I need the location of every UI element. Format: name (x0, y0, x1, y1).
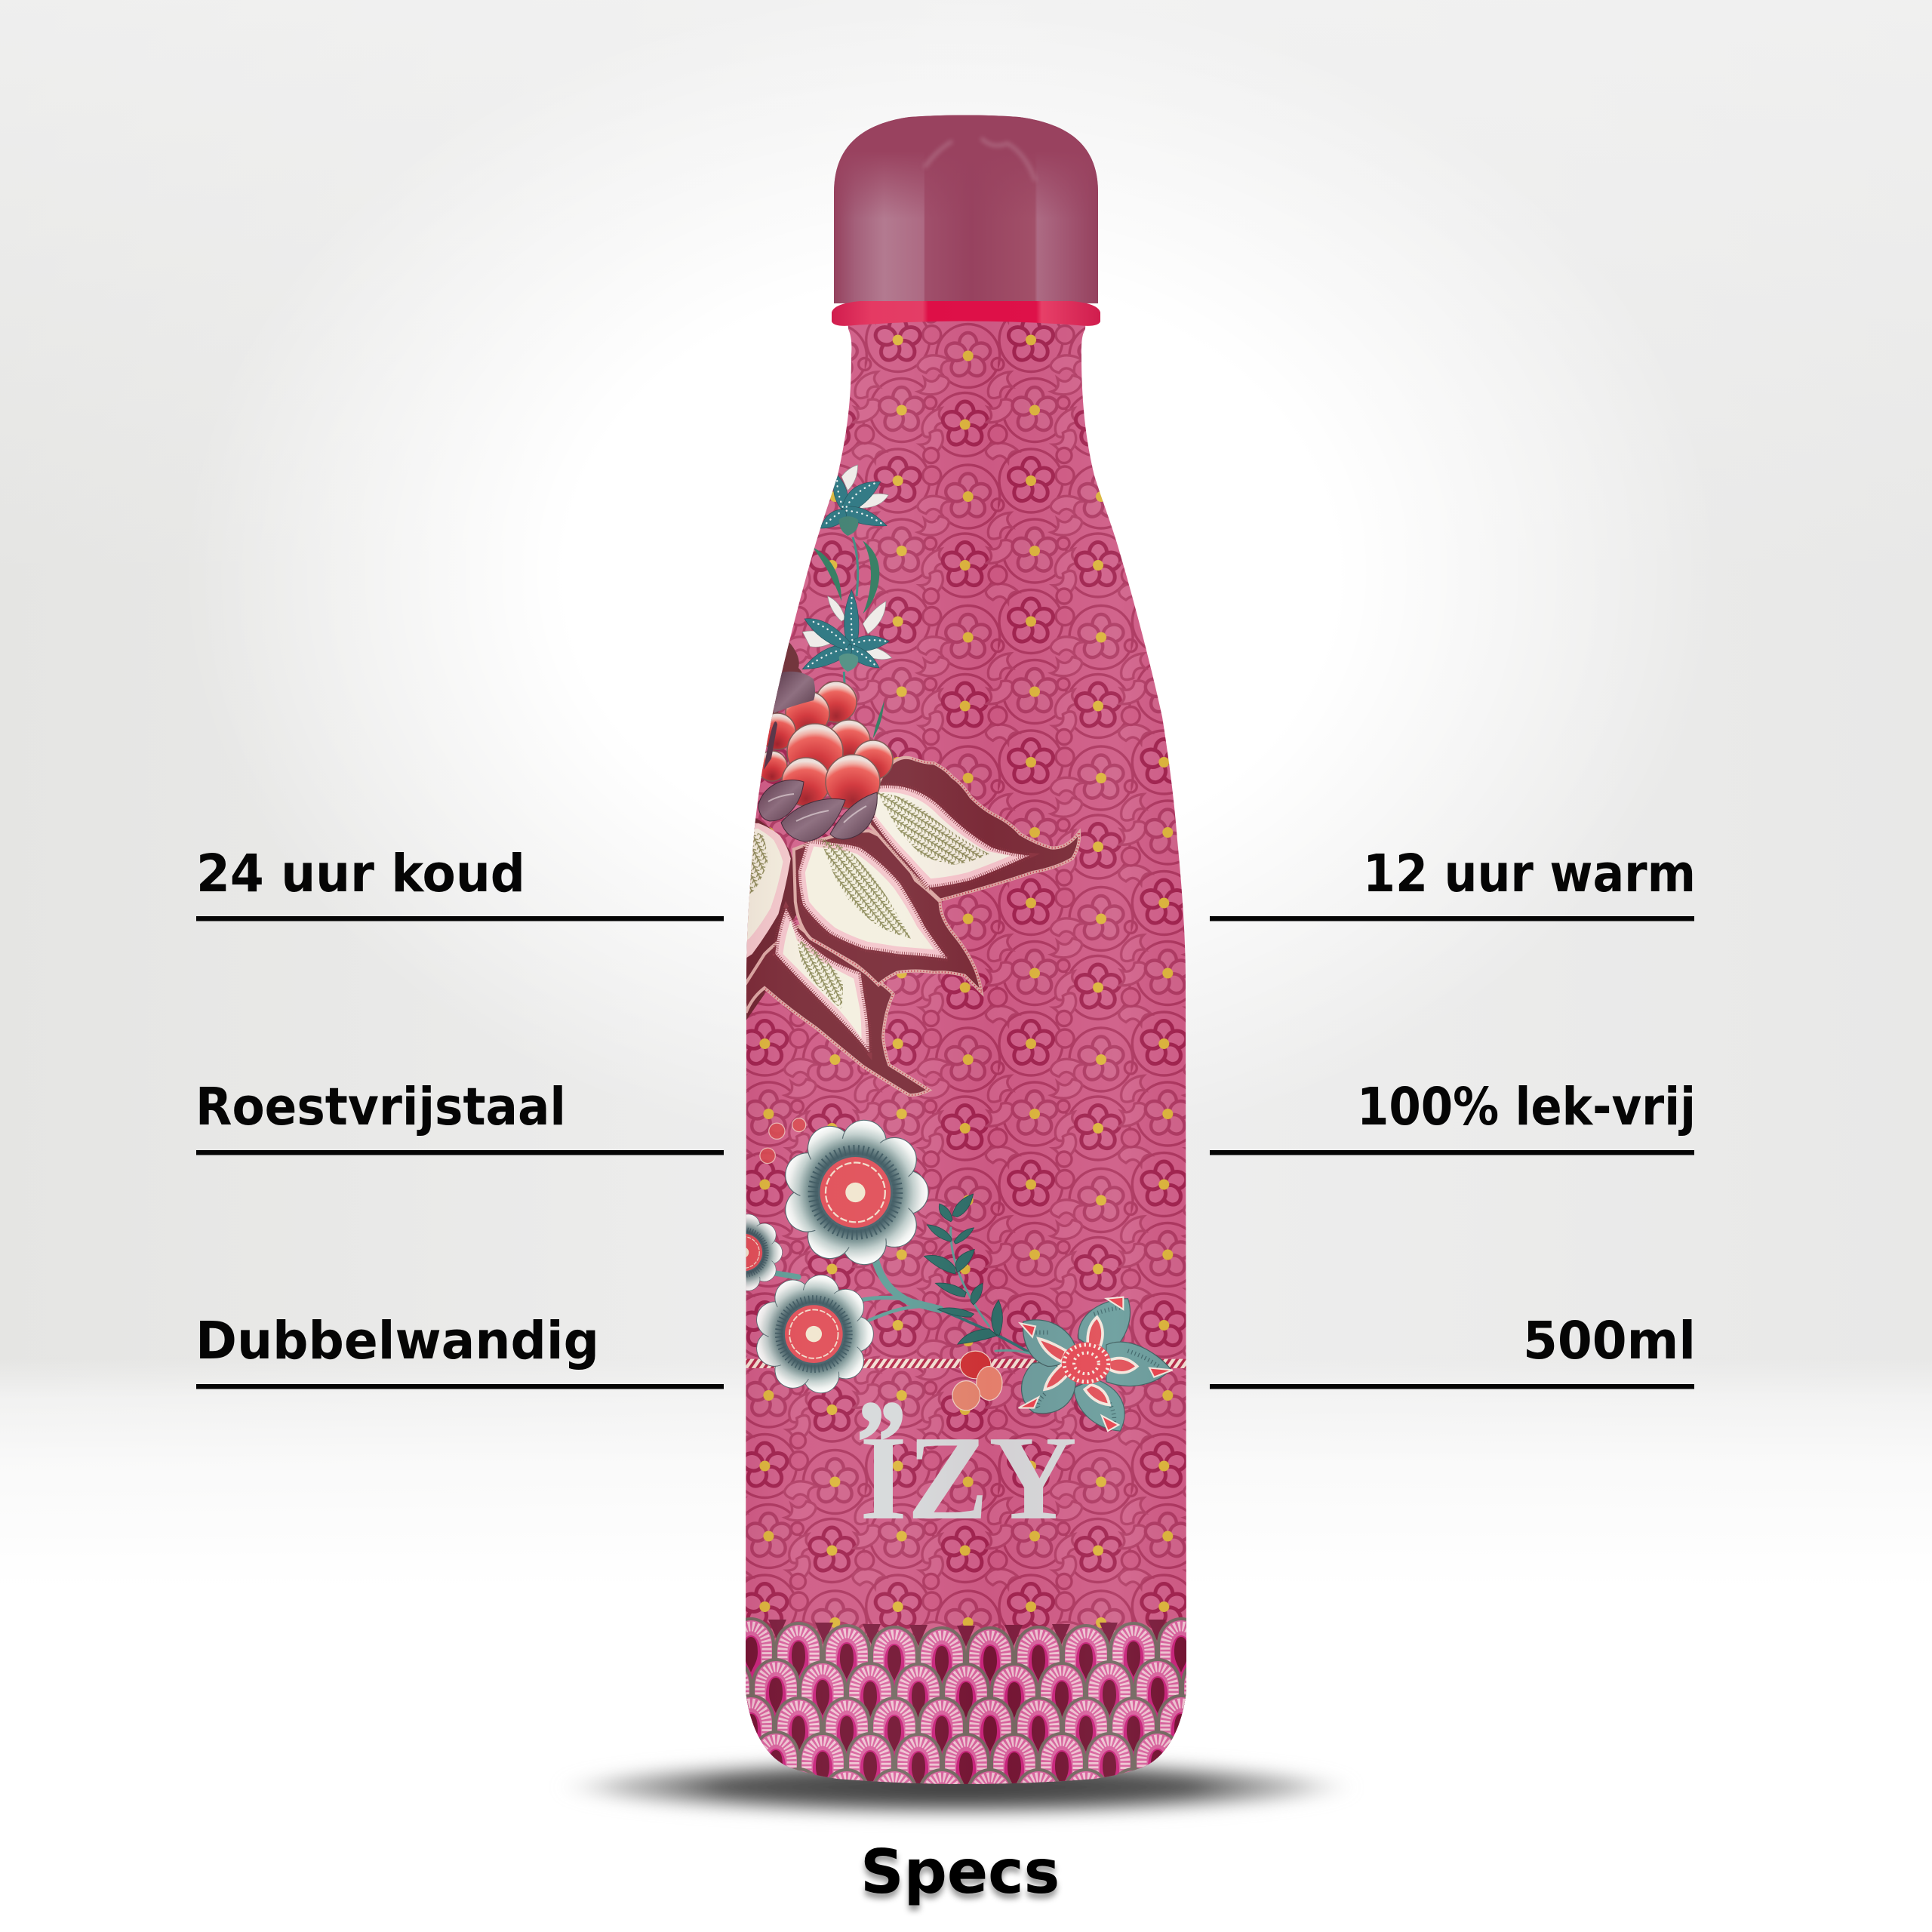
left label: Roestvrijstaal: Roestvrijstaal (195, 1077, 566, 1137)
right label: 500ml: 500ml (1523, 1311, 1696, 1371)
right label: 100% lek-vrij: 100% lek-vrij (1357, 1077, 1696, 1137)
bottle body with damask pattern (746, 321, 1186, 1784)
leaf left (743, 816, 797, 1025)
leaf middle (794, 831, 982, 992)
large batik leaves (743, 758, 1079, 1164)
peony (755, 641, 893, 841)
title: Specs: Specs (860, 1837, 1060, 1907)
left label: 24 uur koud (196, 844, 724, 921)
left label: 24 uur koud: 24 uur koud (196, 844, 525, 904)
bottle (746, 115, 1186, 1784)
blossom lower (752, 1272, 873, 1396)
blossom right-edge cut (746, 1214, 783, 1291)
red buds (952, 1351, 1002, 1411)
right label: 12 uur warm: 12 uur warm (1363, 844, 1696, 904)
blossom large (780, 1117, 928, 1268)
stems (771, 1228, 1032, 1354)
right label: 100% lek-vrij (1210, 1077, 1696, 1155)
berries (760, 1118, 806, 1164)
left label: Roestvrijstaal (195, 1077, 724, 1155)
bottle ring (832, 301, 1100, 326)
right label: 500ml (1210, 1311, 1696, 1389)
teal lily flowers and vine (802, 465, 892, 738)
leaf lower (743, 908, 929, 1095)
star flower (1019, 1297, 1173, 1431)
rope band (743, 1359, 1189, 1368)
logo IZY: IZY (860, 1411, 1077, 1545)
lower floral branch (703, 1117, 1189, 1431)
left label: Dubbelwandig: Dubbelwandig (195, 1311, 599, 1371)
bottle cap (834, 115, 1098, 303)
left label: Dubbelwandig (195, 1311, 724, 1389)
right label: 12 uur warm (1210, 844, 1696, 921)
base scale pattern band (704, 1617, 1229, 1848)
sprig leaves (924, 1194, 1002, 1344)
logo IZY: ” (857, 1379, 906, 1504)
leaf upper right (869, 758, 1079, 900)
shadow under bottle (557, 1757, 1357, 1817)
